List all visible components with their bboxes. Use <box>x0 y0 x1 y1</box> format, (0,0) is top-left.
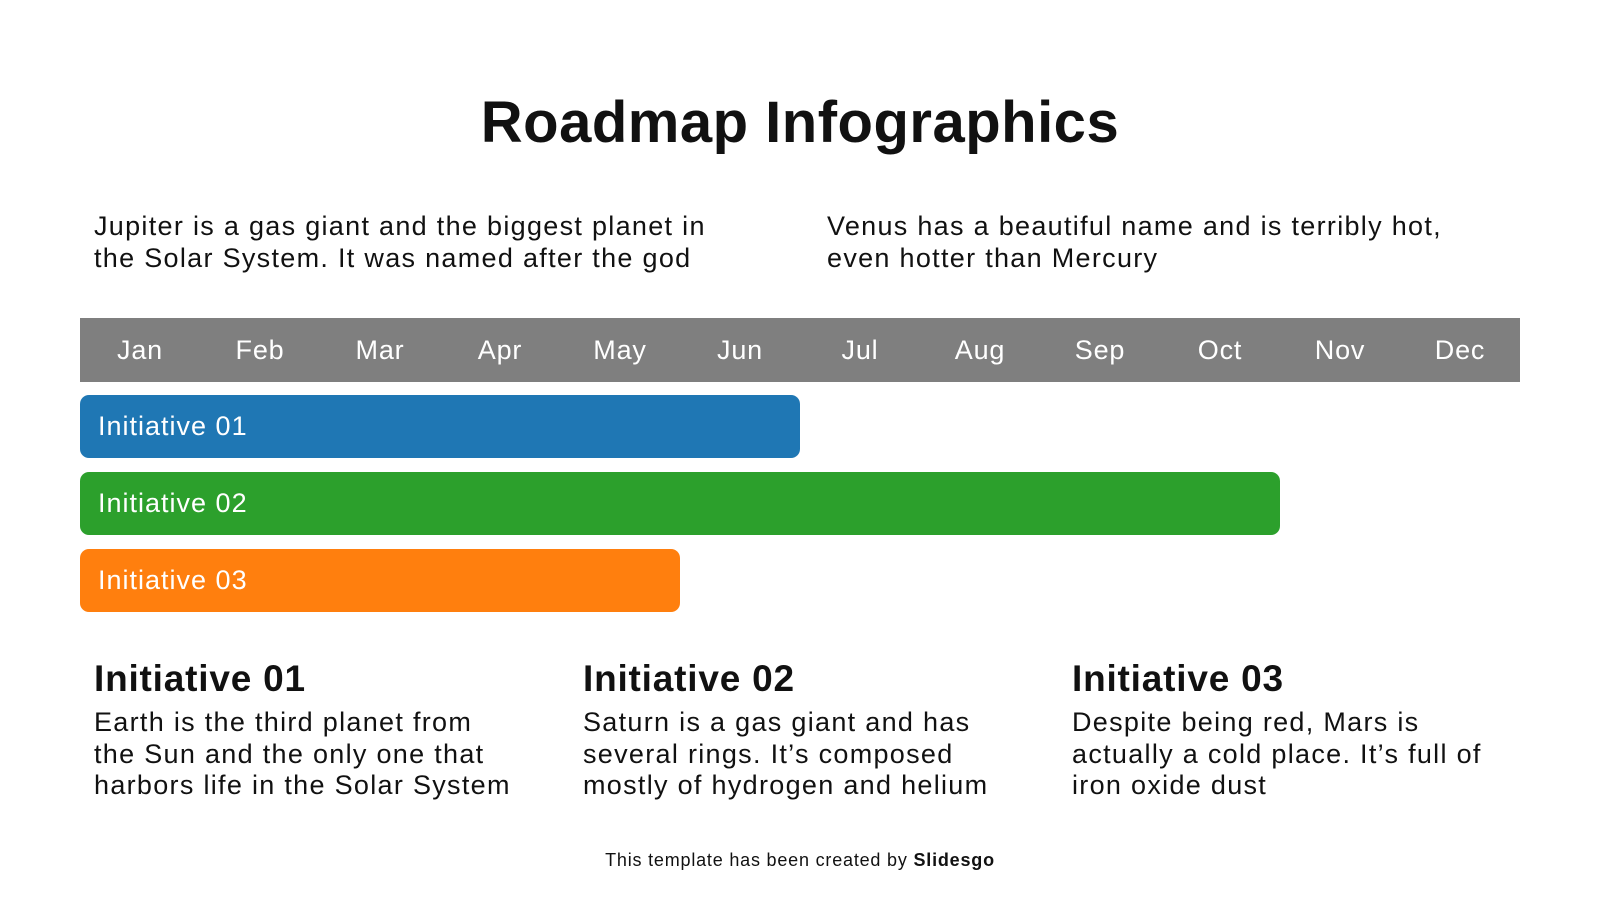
footer: This template has been created by Slidesgo <box>605 850 995 870</box>
month header bar: Dec <box>1435 335 1485 365</box>
month header bar: Jun <box>717 335 763 365</box>
text block: Jupiter: Jupiter is a gas giant and the biggest planet in <box>94 211 706 241</box>
month header bar: Jul <box>842 335 878 365</box>
panel: initiative 03: Initiative 03 <box>1072 658 1284 699</box>
panel: initiative 02: mostly of hydrogen and helium <box>583 770 988 800</box>
bar: initiative 02: Initiative 02 <box>98 488 248 518</box>
panel: initiative 01: Initiative 01 <box>94 658 306 699</box>
title: Roadmap Infographics <box>481 90 1119 155</box>
panel: initiative 03: Despite being red, Mars is <box>1072 707 1419 737</box>
month header bar: Nov <box>1315 335 1365 365</box>
text block: Venus <box>827 211 1442 272</box>
month header bar: Mar <box>356 335 404 365</box>
month header bar: Sep <box>1075 335 1125 365</box>
panel: initiative 02: Saturn is a gas giant and has <box>583 707 970 737</box>
panel: initiative 01 <box>94 658 511 800</box>
panel: initiative 03: iron oxide dust <box>1072 770 1267 800</box>
text block: Jupiter: the Solar System. It was named after the god <box>94 242 691 272</box>
panel: initiative 02 <box>583 658 988 800</box>
panel: initiative 03 <box>1072 658 1482 800</box>
text block: Venus: Venus has a beautiful name and is terribly hot, <box>827 211 1442 241</box>
text block: Venus: even hotter than Mercury <box>827 242 1158 272</box>
month header bar <box>80 318 1520 382</box>
bar: initiative 02 <box>80 472 1280 535</box>
month header bar: Aug <box>955 335 1005 365</box>
bar: initiative 03 <box>80 549 680 612</box>
bar: initiative 03: Initiative 03 <box>98 565 248 595</box>
month header bar: Jan <box>117 335 163 365</box>
panel: initiative 03: actually a cold place. It’s full of <box>1072 738 1482 768</box>
panel: initiative 01: harbors life in the Solar System <box>94 770 511 800</box>
panel: initiative 02: Initiative 02 <box>583 658 795 699</box>
month header bar: Feb <box>236 335 284 365</box>
bar: initiative 01: Initiative 01 <box>98 411 248 441</box>
panel: initiative 01: the Sun and the only one that <box>94 738 484 768</box>
text block: Jupiter <box>94 211 706 272</box>
month header bar: Oct <box>1198 335 1242 365</box>
panel: initiative 02: several rings. It’s composed <box>583 738 954 768</box>
month header bar: Apr <box>478 335 522 365</box>
panel: initiative 01: Earth is the third planet from <box>94 707 472 737</box>
month header bar: May <box>593 335 647 365</box>
bar: initiative 01 <box>80 395 800 458</box>
